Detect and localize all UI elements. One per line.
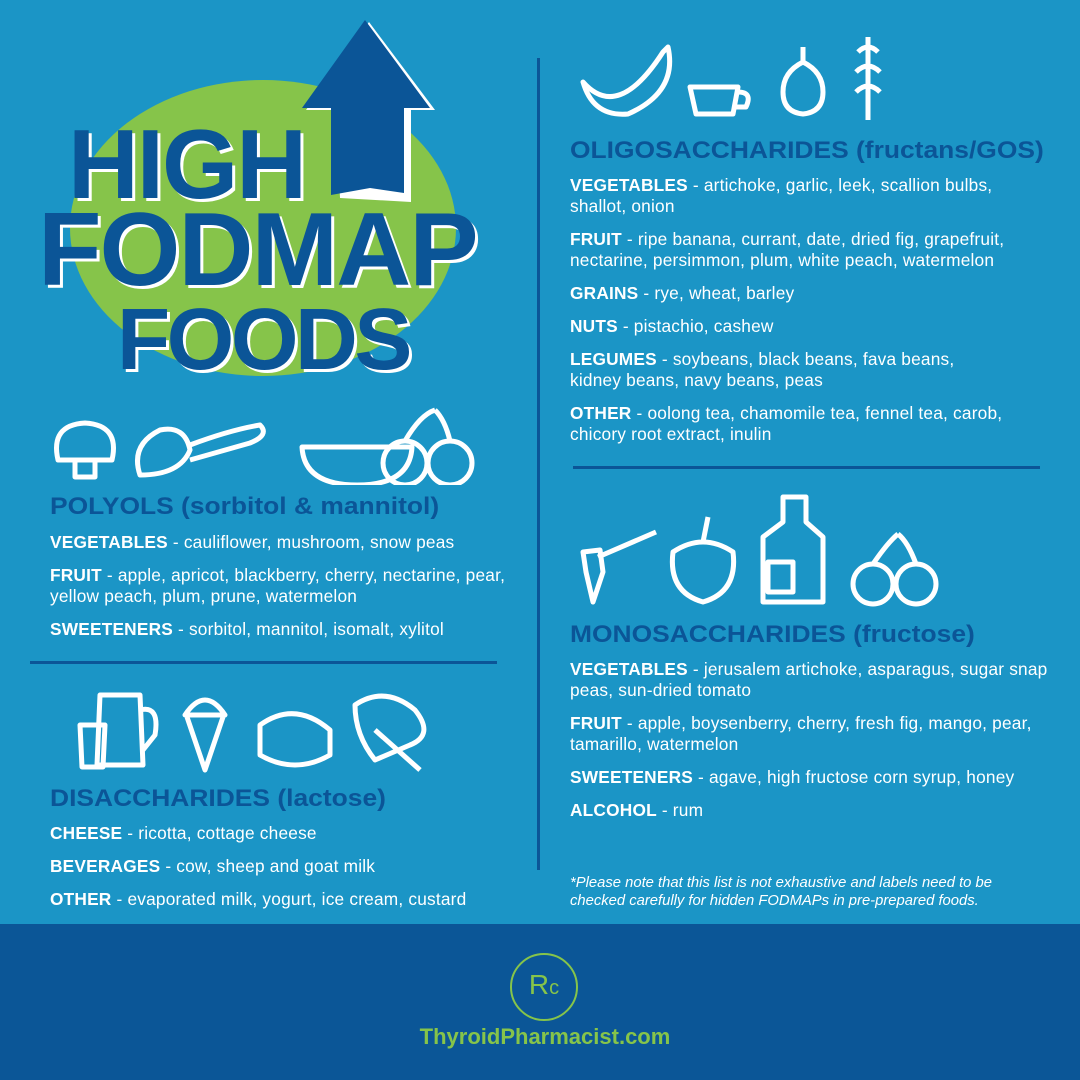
vertical divider xyxy=(537,58,540,870)
text: oligosaccharides xyxy=(570,175,1004,444)
text: monosaccharides: FRUIT - apple, boysenberry, cherry, fresh fig, mango, pear, xyxy=(570,713,1032,733)
text: monosaccharides xyxy=(570,659,1047,820)
text: oligosaccharides: FRUIT - ripe banana, currant, date, dried fig, grapefruit, xyxy=(570,229,1004,249)
footnote xyxy=(570,875,992,909)
heading: disaccharides: DISACCHARIDES (lactose) xyxy=(50,785,386,812)
text: oligosaccharides: nectarine, persimmon, plum, white peach, watermelon xyxy=(570,250,994,270)
website: ThyroidPharmacist.com xyxy=(420,1024,670,1049)
text: monosaccharides: tamarillo, watermelon xyxy=(570,734,738,754)
title graphic: ellipse and arrow xyxy=(70,20,456,376)
logo: Rc xyxy=(529,969,559,1000)
icons: polyols xyxy=(54,408,474,485)
text: monosaccharides: VEGETABLES - jerusalem artichoke, asparagus, sugar snap xyxy=(570,659,1047,679)
text: disaccharides xyxy=(50,823,466,909)
text: polyols: yellow peach, plum, prune, watermelon xyxy=(50,586,357,606)
text: oligosaccharides: VEGETABLES - artichoke, garlic, leek, scallion bulbs, xyxy=(570,175,992,195)
icons: oligosaccharides xyxy=(580,37,882,120)
icons: monosaccharides xyxy=(580,494,938,606)
title: FOODS: FOODS xyxy=(117,291,409,388)
text: oligosaccharides: GRAINS - rye, wheat, barley xyxy=(570,283,794,303)
text: oligosaccharides: shallot, onion xyxy=(570,196,675,216)
text: oligosaccharides: chicory root extract, inulin xyxy=(570,424,772,444)
heading: polyols: POLYOLS (sorbitol & mannitol) xyxy=(50,493,439,520)
text: disaccharides: BEVERAGES - cow, sheep and goat milk xyxy=(50,856,375,876)
text: disaccharides: CHEESE - ricotta, cottage cheese xyxy=(50,823,317,843)
heading: oligosaccharides: OLIGOSACCHARIDES (fructans/GOS) xyxy=(570,137,1044,164)
heading: monosaccharides: MONOSACCHARIDES (fructose) xyxy=(570,621,975,648)
footer xyxy=(0,924,1080,1080)
text: oligosaccharides: LEGUMES - soybeans, black beans, fava beans, xyxy=(570,349,954,369)
logo xyxy=(510,953,578,1021)
text: monosaccharides: SWEETENERS - agave, high fructose corn syrup, honey xyxy=(570,767,1014,787)
footnote: *Please note that this list is not exhaustive and labels need to be xyxy=(570,875,992,891)
icons: disaccharides xyxy=(78,692,426,772)
text: monosaccharides: ALCOHOL - rum xyxy=(570,800,703,820)
title: FODMAP: FODMAP xyxy=(38,192,477,308)
text: disaccharides: OTHER - evaporated milk, yogurt, ice cream, custard xyxy=(50,889,466,909)
text: polyols: SWEETENERS - sorbitol, mannitol, isomalt, xylitol xyxy=(50,619,444,639)
text: oligosaccharides: kidney beans, navy beans, peas xyxy=(570,370,823,390)
text: polyols: FRUIT - apple, apricot, blackberry, cherry, nectarine, pear, xyxy=(50,565,505,585)
title: HIGH: HIGH xyxy=(68,109,305,219)
text: oligosaccharides: NUTS - pistachio, cashew xyxy=(570,316,774,336)
footnote: checked carefully for hidden FODMAPs in pre-prepared foods. xyxy=(570,893,979,909)
text: oligosaccharides: OTHER - oolong tea, chamomile tea, fennel tea, carob, xyxy=(570,403,1002,423)
text: polyols xyxy=(50,532,505,639)
text: monosaccharides: peas, sun-dried tomato xyxy=(570,680,751,700)
text: polyols: VEGETABLES - cauliflower, mushroom, snow peas xyxy=(50,532,454,552)
